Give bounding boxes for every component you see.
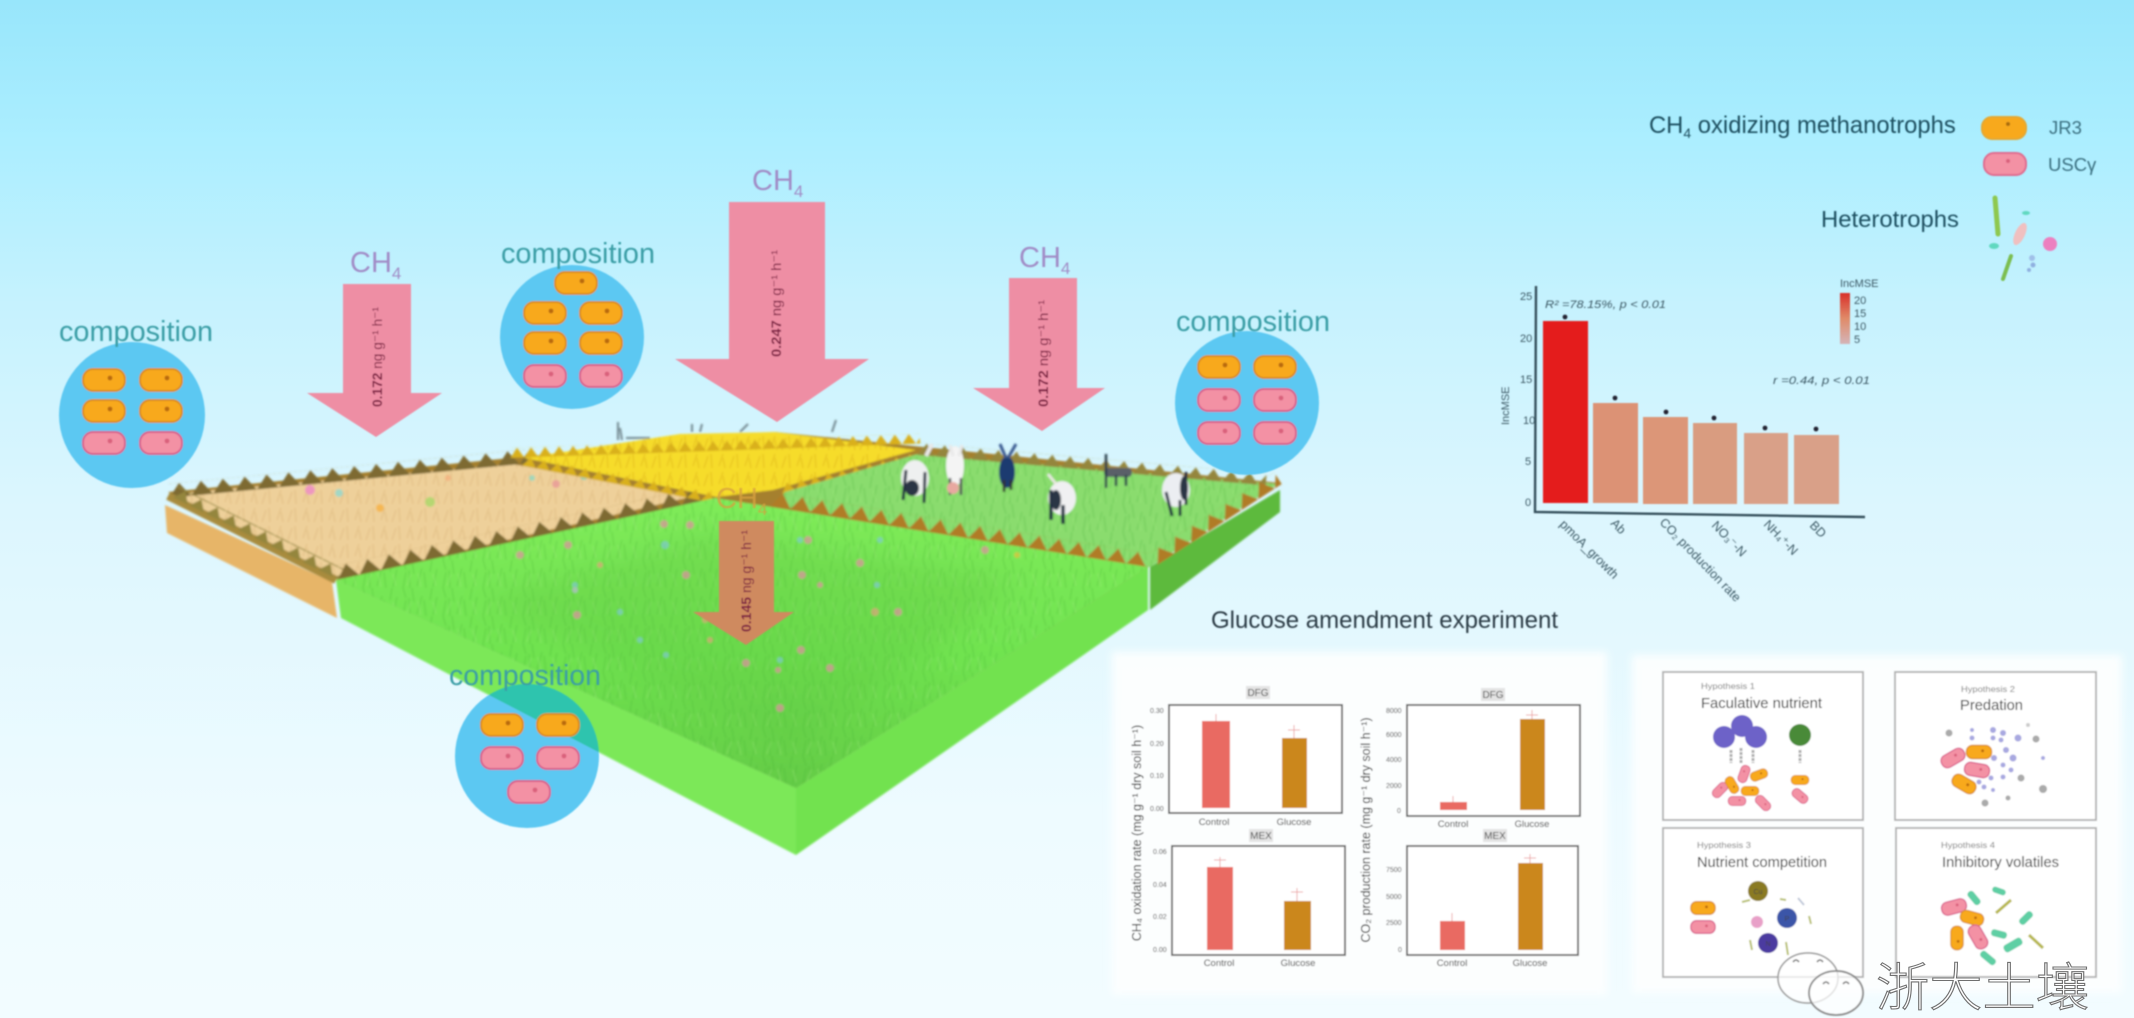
colour scale legend: 15 (1854, 308, 1866, 320)
chart: CH4 MEX: 0.00 (1153, 947, 1167, 954)
heading: composition (501, 238, 655, 270)
CH4 label: 4 (794, 182, 803, 201)
cow 4 (1048, 474, 1076, 524)
bubble (500, 265, 644, 409)
flux value: 0.172 ng g⁻¹ h⁻¹ (369, 307, 385, 407)
plot: large meadow side faces (336, 567, 1148, 855)
colour scale legend: IncMSE (1840, 278, 1879, 290)
chart: CH4 MEX: Glucose (1281, 958, 1315, 969)
plot: pasture side face (1150, 490, 1280, 610)
watermark: account name: 浙大土壤 (1876, 960, 2089, 1018)
category labels: CO₂ production rate (1657, 515, 1744, 605)
panel: glucose amendment charts (1112, 652, 1607, 995)
key: USCγ: USCγ (2048, 154, 2097, 175)
heading: composition (1176, 306, 1330, 338)
CH4 flux arrow: pasture (973, 242, 1105, 431)
bubble (455, 684, 599, 828)
cows grazing on the pasture (901, 444, 1190, 524)
category labels (1557, 515, 1829, 605)
chart: CH4 MEX (1153, 829, 1345, 969)
legend heading: methanotrophs: oxidizing methanotrophs (1691, 112, 1956, 139)
chart: CO2 MEX (1386, 829, 1578, 969)
chart: CO2 DFG: 4000 (1386, 757, 1402, 764)
chart: CO2 MEX: Control (1437, 958, 1467, 969)
farmland platform with four plots (165, 420, 1282, 855)
chart: CO2 DFG: 6000 (1386, 732, 1402, 739)
panel background (1112, 652, 1607, 995)
category labels: NH₄⁺-N (1761, 517, 1801, 558)
plot: sand dryland top (168, 449, 704, 580)
flux value: 0.247 ng g⁻¹ h⁻¹ (768, 250, 784, 357)
CH4 label on meadow: 4 (758, 500, 767, 519)
arrow shape (973, 278, 1105, 431)
microbes (524, 272, 622, 387)
CH4 flux arrow: meadow (693, 483, 794, 645)
importance bar chart (1500, 278, 1879, 605)
y axis ticks: 25 (1520, 291, 1532, 303)
meadow flowers (516, 520, 1020, 712)
colour scale legend: 20 (1854, 295, 1866, 307)
chart: CO2 DFG: Glucose (1515, 819, 1549, 830)
CH4 flux arrow: dryland (307, 247, 442, 437)
key: USCγ (1984, 153, 2097, 175)
chart: CO2 MEX: 2500 (1386, 920, 1402, 927)
heading: composition (449, 660, 601, 692)
cow 2 (946, 445, 964, 495)
chart: CO2 DFG: 0 (1397, 808, 1401, 815)
hypothesis 3: nutrient competition: N (1765, 941, 1771, 948)
bubble (1175, 331, 1319, 475)
chart: CH4 MEX: 0.02 (1153, 914, 1167, 921)
hypothesis 1: facultative nutrient (1663, 672, 1863, 820)
composition bubble: pasture (1175, 306, 1330, 475)
composition bubble: rice field (500, 238, 655, 409)
hypothesis 3: nutrient competition (1663, 828, 1863, 977)
chart: CO2 MEX: 5000 (1386, 894, 1402, 901)
statistics: R squared: R² =78.15%, p < 0.01 (1545, 299, 1666, 311)
hypothesis 4: inhibitory volatiles: Hypothesis 4 (1941, 841, 1996, 850)
category labels: BD (1807, 518, 1829, 541)
y axis ticks: 0 (1525, 497, 1531, 509)
chart: CH4 DFG: Glucose (1277, 817, 1311, 828)
plot: grazed pasture top (771, 443, 1282, 567)
legend heading: methanotrophs: 4 (1683, 125, 1691, 141)
chart: CH4 DFG: 0.00 (1150, 806, 1164, 813)
CH4 label: 4 (1061, 259, 1070, 278)
cow 3 (999, 444, 1016, 492)
colour scale legend (1840, 278, 1879, 346)
hypothesis 4: inhibitory volatiles (1896, 828, 2096, 977)
y axis title: CO2: CO₂ production rate (mg g⁻¹ dry soil h⁻¹) (1359, 717, 1373, 943)
microbes (1198, 356, 1296, 444)
CH4 label: CH (1019, 242, 1061, 274)
chart: CO2 DFG (1386, 688, 1580, 830)
chart: CH4 DFG: 0.10 (1150, 773, 1164, 780)
plot: large meadow top (336, 498, 1148, 788)
CH4 label on meadow: CH (716, 483, 758, 515)
icon: heterotroph cluster (1989, 198, 2057, 279)
bubble (59, 342, 205, 488)
arrow shape (307, 284, 442, 437)
flux value: 0.172 ng g⁻¹ h⁻¹ (1035, 300, 1051, 407)
hypothesis 2: predation: Hypothesis 2 (1961, 685, 2016, 694)
chart: CO2 MEX: MEX (1484, 831, 1506, 842)
legend heading: heterotrophs: Heterotrophs (1821, 206, 1959, 232)
chart: CH4 DFG: 0.30 (1150, 708, 1164, 715)
hypothesis 1: facultative nutrient: Hypothesis 1 (1701, 682, 1756, 691)
y axis title: CH4: CH₄ oxidation rate (mg g⁻¹ dry soil h⁻¹) (1130, 725, 1144, 941)
plot: yellow rice field (510, 432, 924, 504)
category labels: Ab (1608, 516, 1629, 537)
hypothesis 3: nutrient competition: Nutrient competition (1697, 855, 1827, 871)
cow 1 (901, 444, 932, 503)
hypothesis 2: predation: Predation (1960, 698, 2023, 714)
chart: CO2 MEX: Glucose (1513, 958, 1547, 969)
hypothesis 3: nutrient competition: Cu (1754, 889, 1763, 896)
chart: CO2 DFG: Control (1438, 819, 1468, 830)
composition bubble: meadow (449, 660, 601, 828)
CH4 flux arrow: rice field (675, 165, 869, 422)
y axis ticks: 10 (1523, 415, 1535, 427)
chart: CH4 DFG (1150, 686, 1342, 828)
hypothesis 3: nutrient competition: P (1785, 916, 1790, 923)
key: JR3: JR3 (2049, 117, 2082, 138)
colour scale legend: 5 (1854, 334, 1860, 346)
significance marks (1563, 315, 1818, 431)
cow 6 (1162, 472, 1190, 516)
y axis ticks (1520, 291, 1535, 509)
CH4 label: CH (752, 165, 794, 197)
hypothesis 3: nutrient competition: Hypothesis 3 (1697, 841, 1752, 850)
composition bubble: dryland (59, 316, 213, 488)
chart: CH4 DFG: DFG (1247, 688, 1269, 699)
bubble overlap with meadow (489, 684, 600, 752)
y axis title: IncMSE (1500, 386, 1512, 425)
tiny figures on the far edge (618, 420, 836, 440)
CH4 label: CH (350, 247, 392, 279)
colour scale legend: 10 (1854, 321, 1866, 333)
chart: CH4 MEX: MEX (1250, 831, 1272, 842)
hypothesis 1: facultative nutrient: Faculative nutrient (1701, 696, 1822, 712)
chart: CH4 DFG: 0.20 (1150, 741, 1164, 748)
microbes (481, 714, 579, 803)
arrow shape (675, 202, 869, 422)
platform base under plots (168, 432, 1280, 788)
chart: CO2 DFG: 8000 (1386, 708, 1402, 715)
category labels: pmoA_growth (1557, 517, 1621, 582)
chart: CO2 MEX: 0 (1398, 947, 1402, 954)
chart: CH4 MEX: 0.06 (1153, 849, 1167, 856)
key: JR3 (1982, 117, 2082, 139)
heading: composition (59, 316, 213, 348)
plot: sand dryland side face (165, 505, 337, 618)
chart: CO2 MEX: 7500 (1386, 867, 1402, 874)
CH4 label: 4 (392, 264, 401, 283)
y axis ticks: 5 (1525, 456, 1531, 468)
heading: glucose amendment experiment: Glucose amendment experiment (1211, 607, 1558, 634)
category labels: NO₃⁻-N (1709, 518, 1749, 559)
y axis ticks: 15 (1520, 374, 1532, 386)
chart: CO2 DFG: 2000 (1386, 783, 1402, 790)
hypothesis 4: inhibitory volatiles: Inhibitory volatiles (1942, 855, 2059, 871)
arrow shape (693, 521, 794, 645)
watermark: WeChat logo (1778, 953, 1863, 1015)
chart: CH4 MEX: Control (1204, 958, 1234, 969)
panel: hypotheses (1632, 655, 2122, 993)
bars (1543, 321, 1839, 504)
chart: CO2 DFG: DFG (1482, 690, 1504, 701)
y axis ticks: 20 (1520, 333, 1532, 345)
chart: CH4 MEX: 0.04 (1153, 882, 1167, 889)
statistics: correlation: r =0.44, p < 0.01 (1773, 375, 1870, 387)
cow 5 (1104, 454, 1132, 488)
legend: microbe key (1649, 112, 2097, 279)
chart: CH4 DFG: Control (1199, 817, 1229, 828)
panel background (1632, 655, 2122, 993)
flux value: 0.145 ng g⁻¹ h⁻¹ (738, 530, 754, 632)
legend heading: methanotrophs: CH (1649, 112, 1683, 139)
microbes (83, 369, 182, 454)
axes (1535, 286, 1865, 517)
hypothesis 2: predation (1895, 672, 2096, 820)
